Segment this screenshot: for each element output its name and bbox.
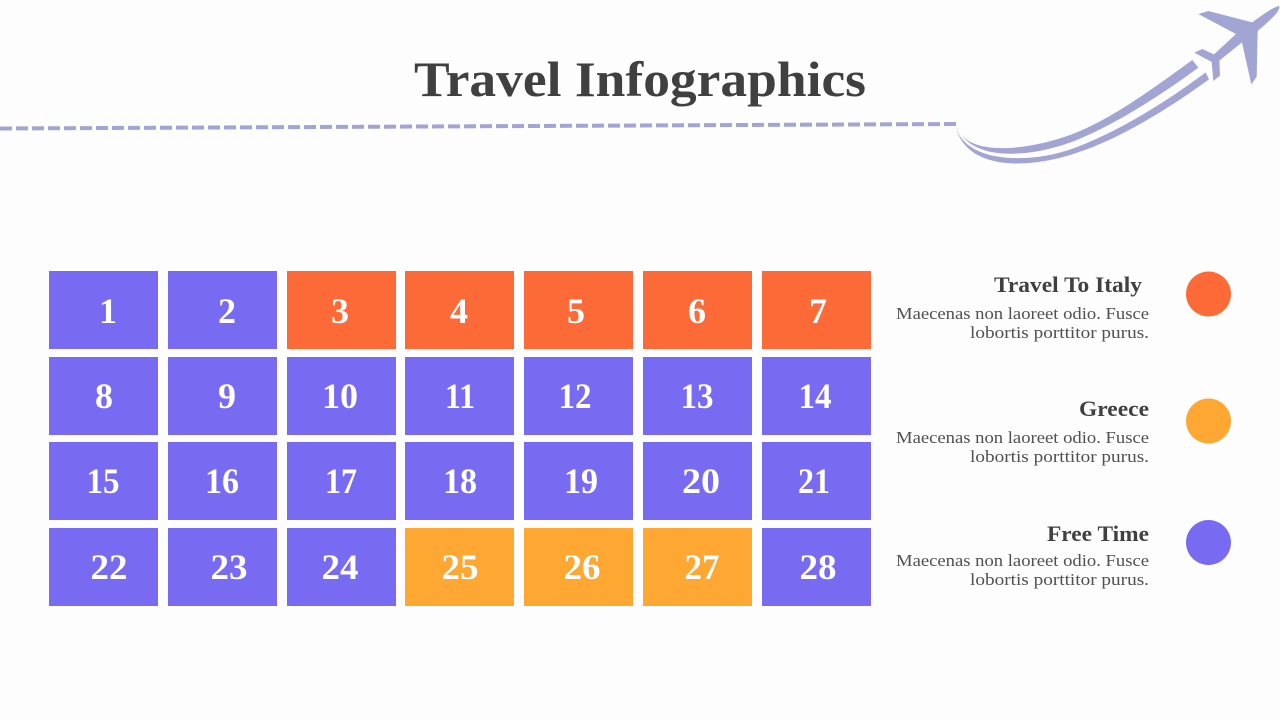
legend: Travel To Italy: Travel To Italy: [994, 272, 1142, 297]
row 1: 3: [331, 291, 349, 331]
legend: Greece: [896, 396, 1231, 466]
row 3: 19: [564, 461, 598, 501]
row 1: 5: [567, 291, 585, 331]
legend: Travel To Italy: Maecenas non laoreet odio. Fusce: [896, 304, 1149, 323]
row 4: 24: [322, 547, 358, 587]
row 2: 9: [218, 376, 236, 416]
row 2: 13: [680, 376, 714, 416]
row 1: 2: [218, 291, 236, 331]
row 4: 26: [564, 547, 600, 587]
dashed flight path: [0, 124, 956, 128]
row 2: [49, 357, 871, 435]
legend: Free Time: Free Time: [1047, 521, 1149, 546]
row 3: [49, 442, 871, 520]
icon: airplane with contrails: [956, 6, 1279, 163]
row 1: [49, 271, 871, 349]
row 3: 15: [86, 461, 120, 501]
row 2: 14: [798, 376, 832, 416]
legend: Travel To Italy: [896, 272, 1231, 342]
legend: Travel To Italy: lobortis porttitor purus.: [970, 323, 1149, 342]
row 2: 12: [558, 376, 592, 416]
row 3: 21: [798, 461, 830, 501]
legend: Greece: Maecenas non laoreet odio. Fusce: [896, 428, 1149, 447]
row 3: 17: [325, 461, 357, 501]
legend: Greece: lobortis porttitor purus.: [970, 447, 1149, 466]
row 3: 16: [205, 461, 239, 501]
row 4: 23: [210, 547, 248, 587]
row 4: 27: [684, 547, 720, 587]
row 3: 18: [443, 461, 477, 501]
row 3: 20: [682, 461, 720, 501]
row 2: 10: [322, 376, 358, 416]
calendar grid: [49, 271, 871, 606]
legend: Free Time: lobortis porttitor purus.: [970, 570, 1149, 589]
title: Travel Infographics: [414, 51, 866, 107]
legend: Free Time: Maecenas non laoreet odio. Fusce: [896, 551, 1149, 570]
legend: Free Time: [896, 520, 1231, 589]
row 1: 6: [688, 291, 706, 331]
row 4: 22: [90, 547, 128, 587]
row 1: 7: [809, 291, 827, 331]
row 1: 4: [450, 291, 468, 331]
row 4: [49, 528, 871, 606]
row 1: 1: [99, 291, 117, 331]
row 4: 25: [442, 547, 478, 587]
row 4: 28: [800, 547, 836, 587]
row 2: 11: [445, 376, 475, 416]
legend: Greece: Greece: [1079, 396, 1149, 421]
row 2: 8: [95, 376, 113, 416]
